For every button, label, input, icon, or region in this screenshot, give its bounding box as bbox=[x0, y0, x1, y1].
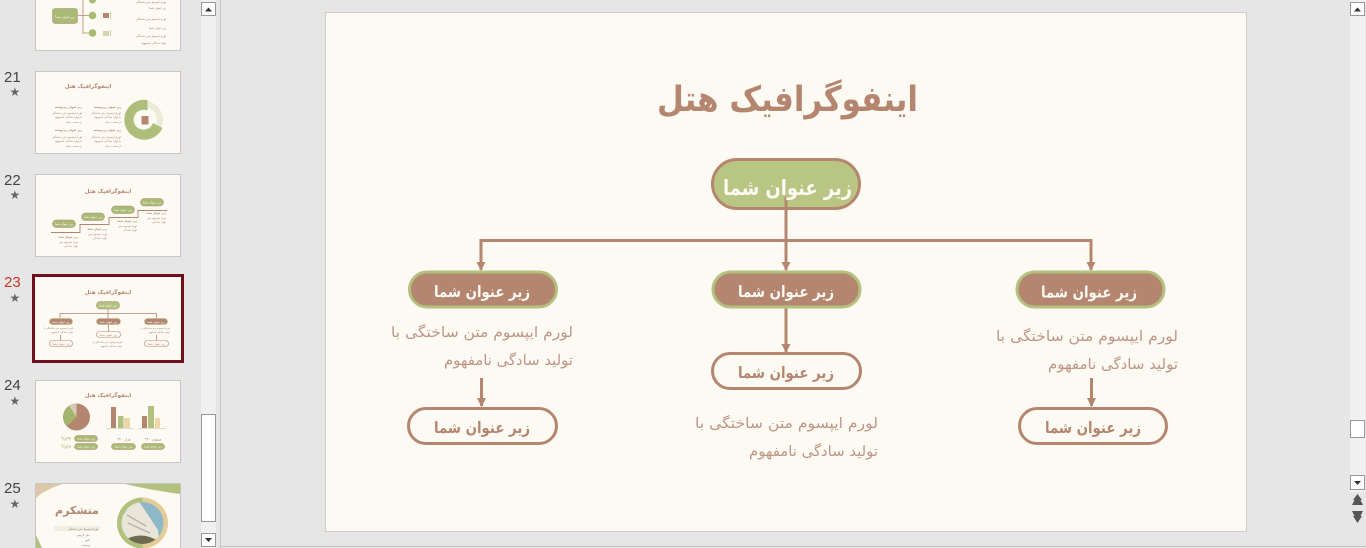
right column: body text: لورم ایپسوم متن ساختگی با bbox=[996, 328, 1178, 345]
right column: outlined pill bbox=[1020, 408, 1166, 444]
thumbnail: slide 22: زیر عنوان شما bbox=[84, 215, 103, 219]
middle column: body text: تولید سادگی نامفهوم bbox=[749, 443, 878, 460]
thumbnail: slide 21: زیر عنوان زیرنوشته bbox=[55, 128, 82, 132]
thumbnail: slide 25: علی کریمی bbox=[77, 533, 90, 537]
thumbnail: slide 22: تولید سادگی bbox=[64, 244, 78, 248]
thumbnail: slide 21: با تولید سادگی نامفهوم bbox=[94, 115, 121, 120]
thumbnail: slide 22: لورم ایپسوم متن bbox=[88, 232, 107, 237]
left column: header pill bbox=[410, 272, 556, 307]
left column: body text: تولید سادگی نامفهوم bbox=[444, 352, 573, 369]
thumbnail: slide 22: زیر عنوان شما bbox=[118, 219, 137, 223]
thumbnail: slide 22 bbox=[36, 174, 180, 256]
thumbnail: slide 21: از صنعت چاپ bbox=[105, 120, 121, 124]
icon: next slide bbox=[1352, 511, 1363, 523]
thumbnail: slide 21: لورم ایپسوم متن ساختگی bbox=[91, 135, 121, 140]
thumbnail: slide 23 (selected) bbox=[34, 276, 182, 362]
thumbnail: slide 21: اینفوگرافیک هتل bbox=[65, 83, 111, 90]
thumbnail: slide 22: زیر عنوان شما bbox=[55, 222, 74, 226]
thumbnail: slide 20: لورم ایپسوم متن ساختگی bbox=[136, 34, 166, 39]
thumbnail: slide 23 (selected): لورم ایپسوم متن ساختگی با bbox=[140, 326, 170, 330]
thumbnail: slide 22: تولید سادگی bbox=[152, 220, 166, 224]
thumbnail: slide 21: از صنعت چاپ bbox=[66, 144, 82, 148]
title: اینفوگرافیک هتل bbox=[657, 79, 918, 120]
thumbnail: slide 22: زیر عنوان شما bbox=[147, 211, 166, 215]
thumbnail: slide 22: تولید سادگی bbox=[93, 236, 107, 240]
thumbnail: slide 22: زیر عنوان شما bbox=[114, 208, 133, 212]
thumbnail: slide 24: ۳۴۰ هزار bbox=[117, 438, 131, 442]
thumbnail: slide 20 bbox=[36, 0, 180, 50]
thumbnail: slide 24: اینفوگرافیک هتل bbox=[85, 392, 131, 399]
thumbnail: slide 22: اینفوگرافیک هتل bbox=[85, 188, 131, 195]
thumbnail: slide 24: زیر عنوان شما bbox=[144, 444, 162, 448]
thumbnail: slide 25: وبسایت bbox=[81, 543, 91, 547]
thumbnail: slide 23 (selected): زیر عنوان شما bbox=[147, 320, 165, 324]
thumbnail: slide 21: با تولید سادگی نامفهوم bbox=[55, 139, 82, 144]
thumbnail: slide 22: زیر عنوان شما bbox=[143, 200, 162, 204]
star marker 24: ★ bbox=[10, 394, 20, 408]
thumbnail: slide 23 (selected): زیر عنوان شما bbox=[99, 304, 117, 308]
left column: outlined pill: زیر عنوان شما bbox=[434, 419, 530, 437]
thumbnail: slide 21: زیر عنوان زیرنوشته bbox=[94, 105, 121, 109]
slide number 25: 25 bbox=[4, 480, 21, 497]
top node: subtitle pill: زیر عنوان شما bbox=[723, 176, 852, 200]
thumbnail: slide 25: متشکرم bbox=[55, 504, 99, 517]
thumbnail: slide 23 (selected): لورم ایپسوم متن ساختگی با bbox=[43, 326, 73, 330]
thumbnail: slide 24: زیر عنوان شما bbox=[77, 436, 95, 440]
thumbnail: slide 21: با تولید سادگی نامفهوم bbox=[94, 139, 121, 144]
middle column: body text: لورم ایپسوم متن ساختگی با bbox=[695, 415, 878, 432]
thumbnail: slide 21: با تولید سادگی نامفهوم bbox=[55, 115, 82, 120]
thumbnail: slide 23 (selected): زیر عنوان شما bbox=[148, 342, 166, 346]
thumbnail: slide 21: زیر عنوان زیرنوشته bbox=[55, 105, 82, 109]
slide number 22: 22 bbox=[4, 172, 21, 189]
thumbnail: slide 21: لورم ایپسوم متن ساختگی bbox=[52, 111, 82, 116]
thumbnail: slide 24: ۲۳۰ میلیون bbox=[145, 438, 161, 442]
thumbnail: slide 23 (selected): لورم ایپسوم متن ساختگی با bbox=[92, 340, 122, 344]
middle column: header pill bbox=[713, 272, 860, 307]
right column: header pill: زیر عنوان شما bbox=[1041, 284, 1137, 302]
right column: outlined pill: زیر عنوان شما bbox=[1045, 419, 1141, 437]
thumbnail: slide 23 (selected): تولید سادگی نامفهوم bbox=[148, 330, 170, 334]
thumbnail: slide 23 (selected): تولید سادگی نامفهوم bbox=[51, 330, 73, 334]
thumbnail: slide 21: زیر عنوان زیرنوشته bbox=[94, 128, 121, 132]
right column: body text: تولید سادگی نامفهوم bbox=[1048, 356, 1178, 373]
thumbnail: slide 22: زیر عنوان شما bbox=[88, 227, 107, 231]
thumbnail: slide 22: تولید سادگی bbox=[123, 228, 137, 232]
thumbnail: slide 23 (selected): زیر عنوان شما bbox=[100, 333, 118, 337]
thumbnail: slide 25: تلفن bbox=[85, 538, 90, 542]
middle column: header pill: زیر عنوان شما bbox=[738, 283, 834, 301]
thumbnail: slide 21: از صنعت چاپ bbox=[105, 144, 121, 148]
middle column: body text bbox=[695, 415, 878, 460]
thumbnail: slide 23 (selected): زیر عنوان شما bbox=[52, 342, 70, 346]
thumbnail: slide 21: لورم ایپسوم متن ساختگی bbox=[91, 111, 121, 116]
panel: slide thumbnails bbox=[4, 0, 182, 548]
thumbnail: slide 20: تولید سادگی نامفهوم bbox=[142, 41, 166, 46]
thumbnail: slide 20: زیر عنوان شما bbox=[55, 15, 75, 19]
top node: subtitle pill bbox=[712, 160, 860, 209]
thumbnail: slide 25: لورم ایپسوم متن ساختگی bbox=[68, 527, 98, 532]
slide number 21: 21 bbox=[4, 69, 21, 86]
thumbnail: slide 24: %۷۷ bbox=[61, 444, 71, 450]
star marker 21: ★ bbox=[10, 85, 20, 99]
left column: header pill: زیر عنوان شما bbox=[434, 283, 530, 301]
thumbnail: slide 22: لورم ایپسوم متن bbox=[59, 240, 78, 245]
pie chart bbox=[63, 403, 90, 430]
star marker 22: ★ bbox=[10, 188, 20, 202]
panel: main scrollbar bbox=[1350, 0, 1365, 523]
panel: thumbnail scrollbar bbox=[201, 0, 216, 548]
left column: body text: لورم ایپسوم متن ساختگی با bbox=[391, 324, 573, 341]
middle column: outlined pill bbox=[712, 354, 860, 388]
star marker 23: ★ bbox=[10, 291, 20, 305]
thumbnail: slide 23 (selected): زیر عنوان شما bbox=[52, 320, 70, 324]
thumbnail: slide 24: زیر عنوان شما bbox=[77, 444, 95, 448]
connector lines and arrows bbox=[481, 197, 1092, 406]
thumbnail: slide 22: لورم ایپسوم متن bbox=[118, 224, 137, 229]
panel: slide canvas bbox=[326, 12, 1246, 532]
thumbnail: slide 21: لورم ایپسوم متن ساختگی bbox=[52, 135, 82, 140]
thumbnail: slide 24: زیر عنوان شما bbox=[115, 444, 133, 448]
thumbnail: slide 22: زیر عنوان شما bbox=[59, 235, 78, 239]
thumbnail: slide 23 (selected): زیر عنوان شما bbox=[100, 320, 118, 324]
icon: previous slide bbox=[1352, 494, 1363, 505]
thumbnail: slide 23 (selected): تولید سادگی نامفهوم bbox=[100, 344, 122, 348]
thumbnail: slide 21: از صنعت چاپ bbox=[66, 120, 82, 124]
slide number 24: 24 bbox=[4, 377, 21, 394]
left column: outlined pill bbox=[408, 408, 556, 444]
right column: header pill bbox=[1017, 272, 1164, 307]
thumbnail: slide 21 bbox=[36, 72, 180, 154]
thumbnail: slide 22: لورم ایپسوم متن bbox=[147, 216, 166, 221]
thumbnail: slide 24: %۳۳ bbox=[61, 436, 71, 442]
thumbnail: slide 23 (selected): اینفوگرافیک هتل bbox=[85, 289, 131, 296]
star marker 25: ★ bbox=[10, 497, 20, 511]
thumbnail: slide 20: زیر عنوان شما bbox=[149, 6, 167, 10]
thumbnail: slide 20: زیر عنوان شما bbox=[149, 26, 167, 30]
thumbnail: slide 20: لورم ایپسوم متن ساختگی bbox=[136, 17, 166, 22]
thumbnail: slide 24 bbox=[36, 380, 180, 462]
right column: body text bbox=[996, 328, 1178, 373]
slide number 23 (current): 23 bbox=[4, 274, 21, 291]
bar charts bbox=[106, 406, 166, 428]
thumbnail: slide 25 bbox=[36, 484, 180, 548]
thumbnail: slide 20: لورم ایپسوم متن ساختگی bbox=[136, 0, 166, 5]
photo in circle bbox=[117, 498, 168, 548]
left column: body text bbox=[391, 324, 573, 369]
middle column: outlined pill: زیر عنوان شما bbox=[738, 364, 834, 382]
